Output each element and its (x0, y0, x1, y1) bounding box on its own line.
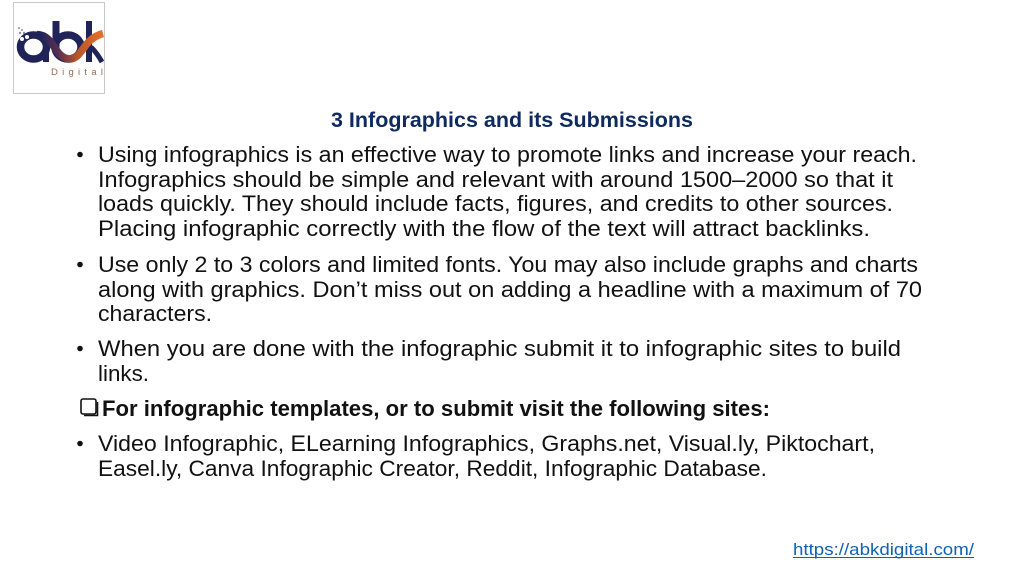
bullet text block: colors and fonts (77, 252, 922, 326)
bullet text block: sites: Video Infographic, ELearning Infographics, Graphs.net, Visual.ly, Piktochart, (98, 431, 875, 456)
bullet marker (77, 152, 83, 157)
logo: abk Digital (14, 2, 104, 94)
bullet text block: sites (77, 431, 875, 481)
bullet text block: using infographics: Using infographics is an effective way to promote links and increase your reach. (98, 142, 917, 167)
bullet text block: submit (77, 336, 901, 386)
bullet marker (77, 346, 83, 351)
subheading with checkbox: For infographic templates, or to submit visit the following sites: (102, 396, 770, 421)
bullet marker (77, 262, 83, 267)
bullet text block: using infographics: loads quickly. They should include facts, figures, and credits to other sources. (98, 191, 893, 216)
bullet text block: using infographics: Infographics should be simple and relevant with around 1500–2000 so that it (98, 167, 893, 192)
bullet text block: colors and fonts: along with graphics. Don’t miss out on adding a headline with a maximum of 70 (98, 277, 922, 302)
bullet text block: colors and fonts: Use only 2 to 3 colors and limited fonts. You may also include graphs and charts (98, 252, 918, 277)
bullet text block: sites: Easel.ly, Canva Infographic Creator, Reddit, Infographic Database. (98, 456, 767, 481)
bullet marker (77, 441, 83, 446)
bullet text block: submit: When you are done with the infographic submit it to infographic sites to build (98, 336, 901, 361)
bullet text block: using infographics: Placing infographic correctly with the flow of the text will attract backlinks. (98, 216, 870, 241)
bullet text block: submit: links. (98, 361, 149, 386)
bullet text block: using infographics (77, 142, 917, 241)
icon: checkbox (81, 399, 98, 416)
logo: abk Digital: Digital (51, 67, 103, 78)
title: 3 Infographics and its Submissions (331, 109, 693, 132)
bullet text block: colors and fonts: characters. (98, 301, 212, 326)
footer link: https://abkdigital.com/ (793, 540, 974, 559)
